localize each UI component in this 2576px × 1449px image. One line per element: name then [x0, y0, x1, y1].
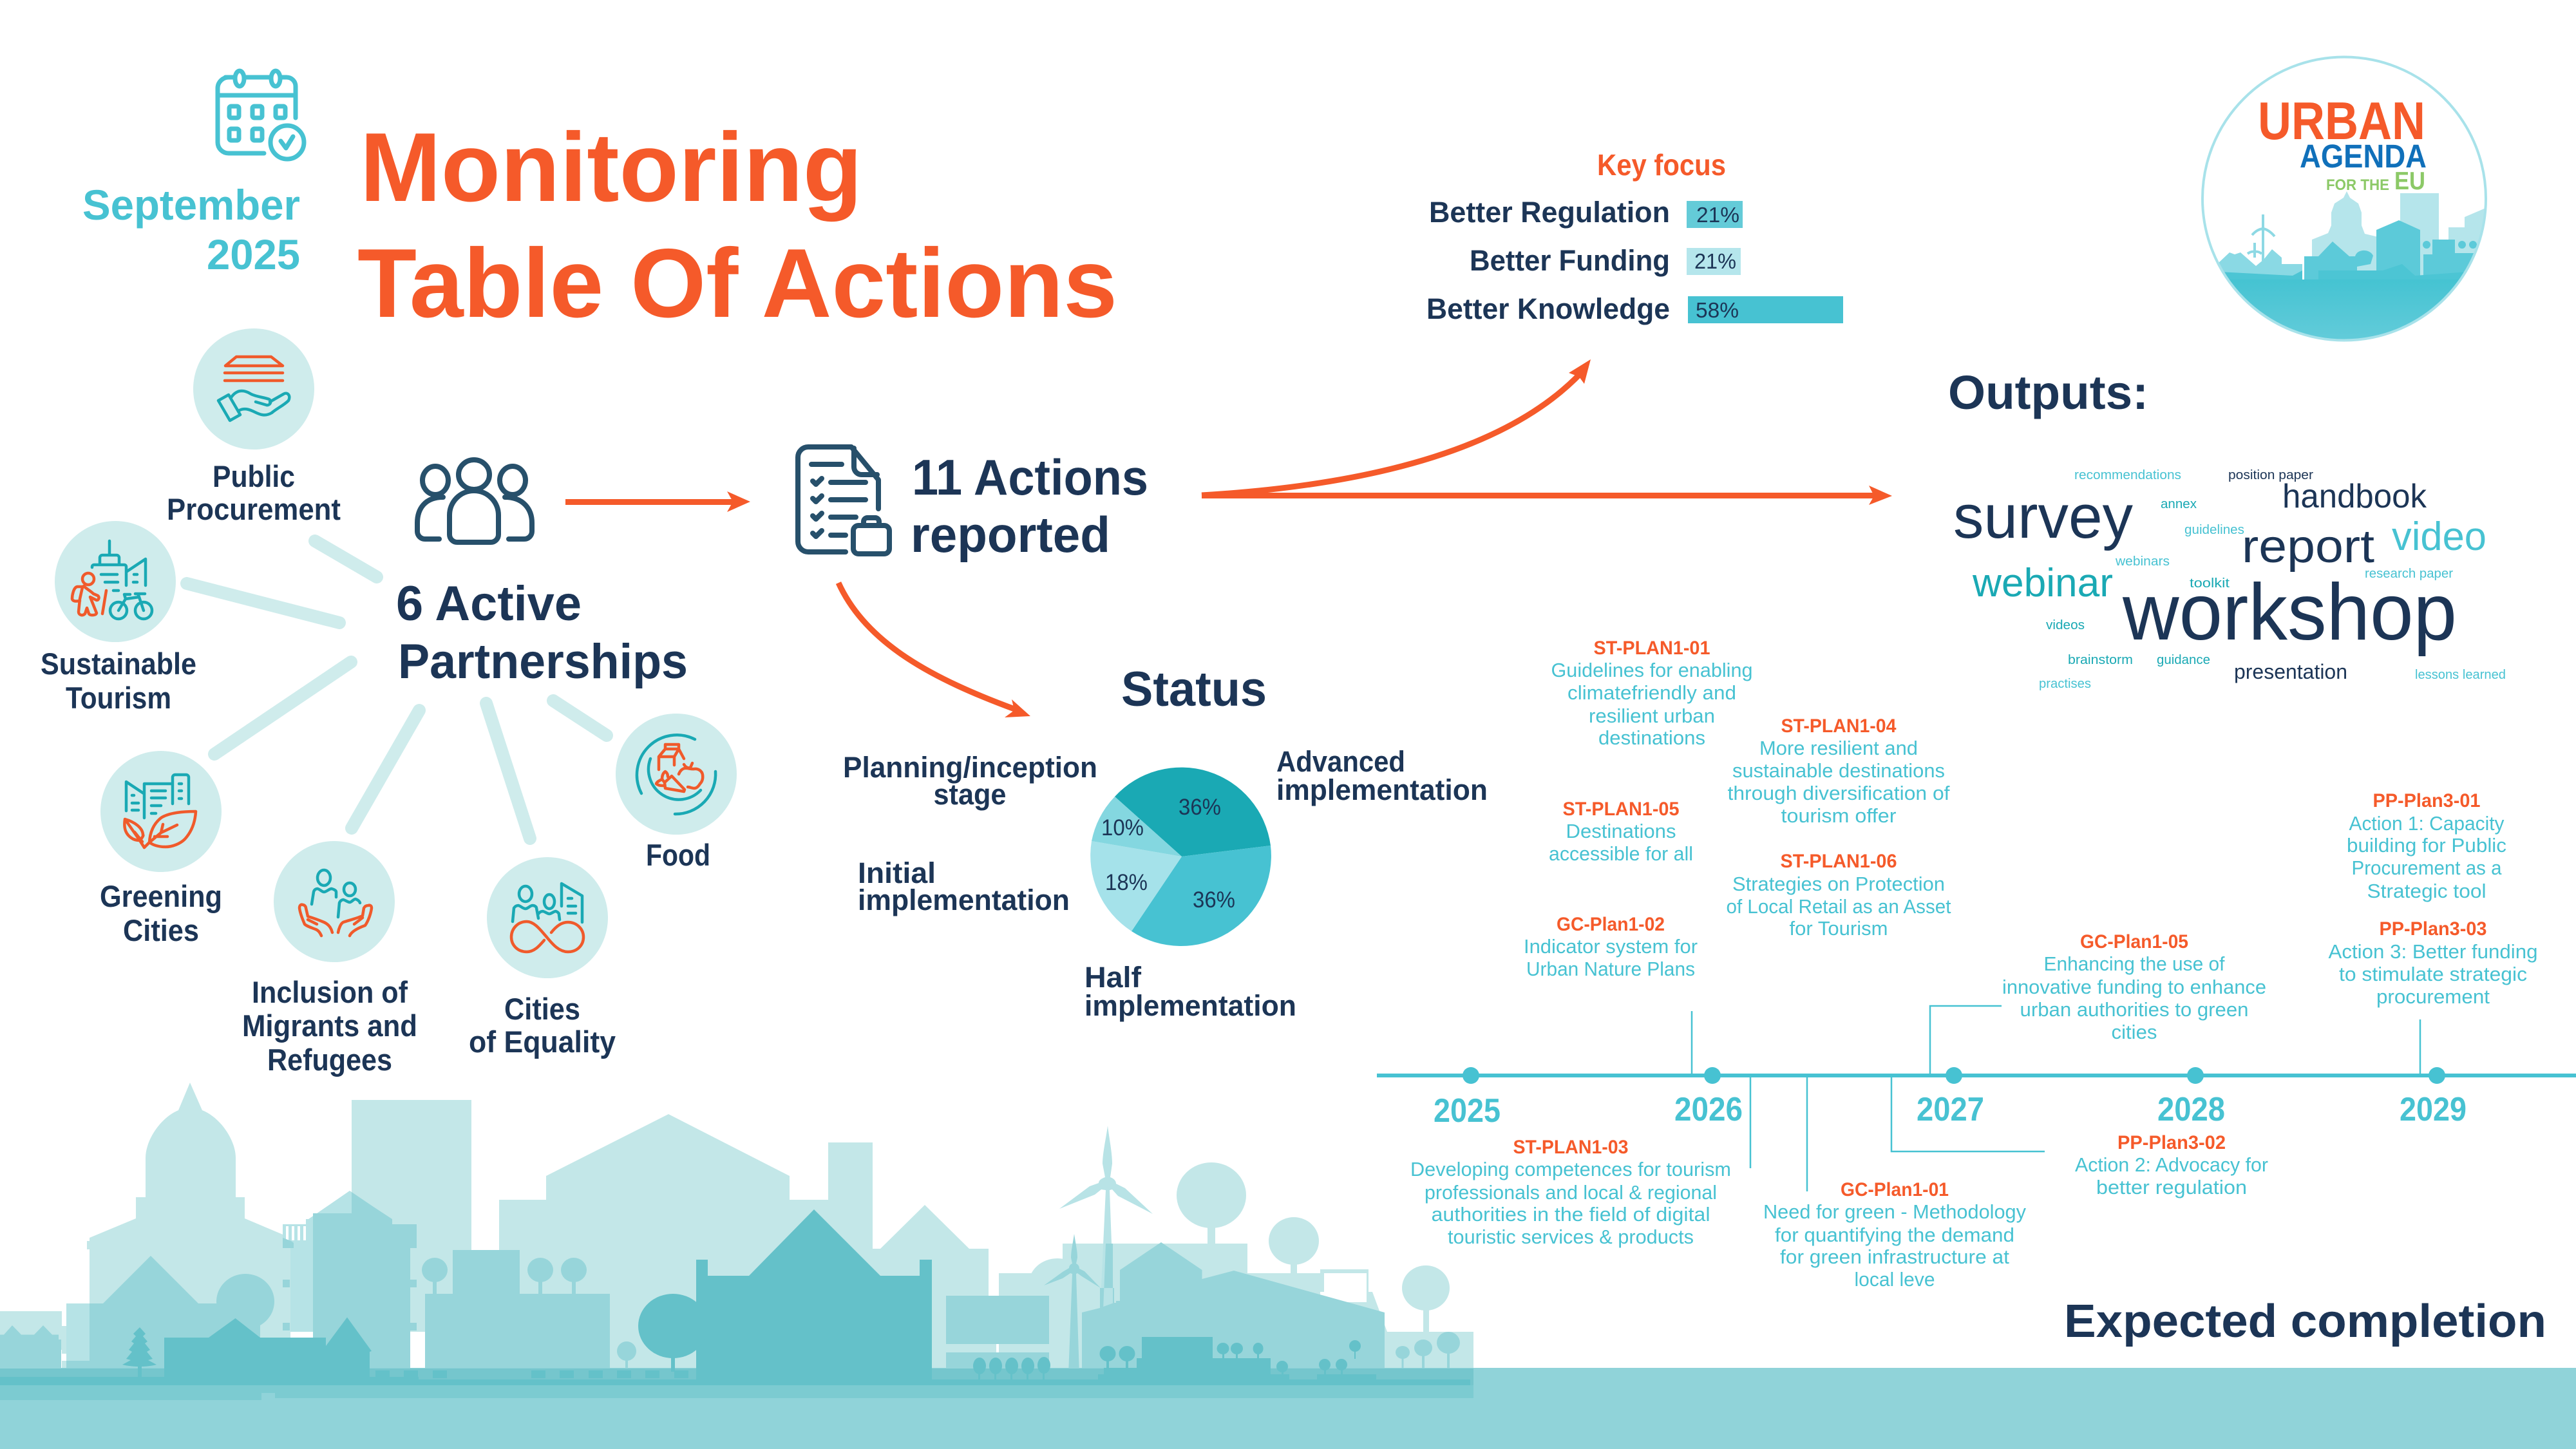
- action: ST-PLAN1-03: professionals and local & regional: [1425, 1181, 1717, 1204]
- action: GC-Plan1-01: Need for green - Methodology: [1763, 1200, 2026, 1223]
- action: GC-Plan1-01: [1763, 1179, 2026, 1291]
- illustration: city skyline: [0, 1083, 1473, 1400]
- word cloud: video: [2392, 515, 2486, 559]
- action: PP-Plan3-02: [2075, 1132, 2268, 1198]
- small wind turbine: [1044, 1234, 1101, 1375]
- icon: group of people: [417, 460, 532, 542]
- action: GC-Plan1-05: cities: [2111, 1021, 2157, 1043]
- timeline: [1377, 638, 2576, 1291]
- action: ST-PLAN1-03: [1410, 1137, 1731, 1248]
- word cloud: handbook: [2282, 478, 2427, 515]
- pie labels: Advanced: [1276, 745, 1405, 778]
- heading: 11 actions reported: [911, 449, 1148, 563]
- action: ST-PLAN1-01: Guidelines for enabling: [1551, 659, 1753, 681]
- pie chart: 10%: [1101, 815, 1144, 840]
- action: ST-PLAN1-01: destinations: [1598, 726, 1705, 749]
- timeline axis and year markers: [1377, 1067, 2576, 1130]
- date: September: [82, 181, 300, 229]
- pie labels: stage: [934, 778, 1006, 811]
- word cloud: webinar: [1972, 561, 2113, 605]
- bar chart: 58%: [1696, 298, 1739, 322]
- heading: 6 active partnerships: Partnerships: [398, 634, 688, 689]
- word cloud: practises: [2039, 677, 2091, 691]
- partnership: cities of equality: Cities: [504, 992, 580, 1026]
- action: PP-Plan3-01: Procurement as a: [2352, 857, 2502, 879]
- heading: expected completion: Expected completion: [2064, 1296, 2546, 1347]
- timeline connectors: [1692, 1006, 2420, 1191]
- action: ST-PLAN1-05: Destinations: [1566, 820, 1676, 842]
- action: ST-PLAN1-01: resilient urban: [1589, 705, 1715, 727]
- pie labels: Initial: [858, 857, 936, 889]
- action: PP-Plan3-03: PP-Plan3-03: [2379, 918, 2487, 940]
- action: PP-Plan3-01: Strategic tool: [2367, 880, 2486, 902]
- action: ST-PLAN1-04: through diversification of: [1727, 782, 1950, 804]
- action: GC-Plan1-01: local leve: [1855, 1268, 1935, 1291]
- heading: 11 actions reported: 11 Actions: [912, 449, 1148, 506]
- partnership: inclusion of migrants and refugees: [242, 841, 417, 1077]
- action: GC-Plan1-01: for quantifying the demand: [1775, 1224, 2014, 1246]
- action: GC-Plan1-05: GC-Plan1-05: [2080, 931, 2188, 952]
- action: ST-PLAN1-04: sustainable destinations: [1732, 759, 1945, 782]
- action: GC-Plan1-02: [1524, 914, 1698, 980]
- logo: urban agenda for the eu: URBAN: [2258, 91, 2425, 151]
- word cloud: toolkit: [2190, 576, 2230, 591]
- heading: key focus: Key focus: [1597, 148, 1726, 182]
- bar chart: 21%: [1696, 203, 1739, 227]
- partnership: public procurement: Public: [213, 459, 295, 493]
- partnership: public procurement: [167, 328, 341, 526]
- partnership: inclusion of migrants and refugees: Migrants and: [242, 1009, 417, 1043]
- arrow: actions to outputs: [1202, 486, 1892, 505]
- big wind turbine: [1059, 1126, 1153, 1314]
- action: ST-PLAN1-01: ST-PLAN1-01: [1593, 638, 1710, 659]
- word cloud: workshop: [2122, 568, 2457, 657]
- word cloud: webinars: [2115, 554, 2170, 569]
- panel: key focus: [1426, 148, 1843, 325]
- action: PP-Plan3-02: PP-Plan3-02: [2117, 1132, 2226, 1153]
- heading: 6 active partnerships: 6 Active: [396, 576, 582, 631]
- timeline axis and year markers: 2027: [1917, 1091, 1984, 1128]
- partnership: inclusion of migrants and refugees: Inclusion of: [252, 975, 408, 1009]
- action: PP-Plan3-01: [2347, 790, 2506, 902]
- partnership: inclusion of migrants and refugees: Refugees: [267, 1043, 392, 1077]
- word cloud: lessons learned: [2415, 668, 2506, 682]
- action: ST-PLAN1-01: climatefriendly and: [1567, 681, 1736, 704]
- action: PP-Plan3-01: Action 1: Capacity: [2349, 812, 2505, 835]
- word cloud: annex: [2161, 497, 2197, 511]
- pie labels: implementation: [1276, 773, 1488, 806]
- timeline axis and year markers: 2028: [2157, 1091, 2225, 1128]
- action: ST-PLAN1-06: [1726, 851, 1951, 940]
- action: GC-Plan1-02: Urban Nature Plans: [1526, 958, 1695, 980]
- arrow: actions to status: [838, 583, 1030, 717]
- partnership: cities of equality: of Equality: [469, 1025, 616, 1059]
- timeline axis and year markers: 2026: [1674, 1091, 1743, 1128]
- heading: 6 active partnerships: [396, 576, 688, 689]
- word cloud: guidelines: [2184, 523, 2244, 537]
- action: ST-PLAN1-05: [1549, 799, 1693, 865]
- action: ST-PLAN1-03: ST-PLAN1-03: [1513, 1137, 1628, 1158]
- ground band: [0, 1368, 2576, 1449]
- icon: checklist document: [798, 447, 889, 554]
- action: GC-Plan1-01: for green infrastructure at: [1780, 1245, 2009, 1268]
- action: GC-Plan1-02: GC-Plan1-02: [1557, 914, 1665, 935]
- arrow: partnerships to actions: [565, 491, 750, 512]
- word cloud: research paper: [2365, 567, 2453, 581]
- timeline axis and year markers: 2025: [1434, 1092, 1501, 1130]
- action: PP-Plan3-03: Action 3: Better funding: [2329, 940, 2537, 963]
- action: GC-Plan1-05: Enhancing the use of: [2044, 952, 2225, 975]
- action: ST-PLAN1-04: [1727, 715, 1950, 827]
- action: ST-PLAN1-03: touristic services & products: [1448, 1226, 1694, 1248]
- date: 2025: [207, 231, 300, 278]
- pie chart: 18%: [1105, 870, 1148, 895]
- partnership: food: [616, 714, 737, 872]
- partnership: sustainable tourism: [41, 521, 196, 715]
- action: PP-Plan3-03: [2329, 918, 2537, 1008]
- logo: urban agenda for the eu: [2190, 57, 2499, 344]
- word cloud: videos: [2046, 618, 2085, 632]
- heading: 11 actions reported: reported: [911, 506, 1110, 563]
- action: PP-Plan3-03: to stimulate strategic: [2339, 963, 2527, 985]
- pie labels: implementation: [858, 884, 1070, 916]
- logo: urban agenda for the eu: EU: [2394, 167, 2425, 195]
- partnership: food: Food: [646, 838, 710, 872]
- partnership: cities of equality: [469, 857, 616, 1059]
- action: PP-Plan3-03: procurement: [2376, 985, 2490, 1008]
- word cloud: brainstorm: [2068, 653, 2133, 667]
- action: GC-Plan1-05: innovative funding to enhance: [2002, 976, 2266, 998]
- word cloud: position paper: [2228, 468, 2313, 482]
- action: GC-Plan1-02: Indicator system for: [1524, 935, 1698, 958]
- heading: outputs: Outputs:: [1948, 366, 2148, 419]
- title: Monitoring: [360, 113, 862, 222]
- title: Table Of Actions: [357, 229, 1117, 338]
- pie chart: 36%: [1193, 887, 1235, 913]
- action: PP-Plan3-02: better regulation: [2096, 1176, 2247, 1198]
- action: GC-Plan1-01: GC-Plan1-01: [1841, 1179, 1949, 1200]
- pie labels: Half: [1084, 961, 1142, 994]
- bar chart: Better Knowledge: [1426, 292, 1670, 325]
- word cloud: presentation: [2234, 660, 2347, 683]
- action: ST-PLAN1-01: [1551, 638, 1753, 749]
- action: ST-PLAN1-06: ST-PLAN1-06: [1780, 851, 1897, 872]
- pie labels: [843, 745, 1488, 1022]
- action: PP-Plan3-01: building for Public: [2347, 834, 2506, 857]
- logo: urban agenda for the eu: FOR THE: [2326, 176, 2389, 194]
- partnership: sustainable tourism: Sustainable: [41, 647, 196, 681]
- timeline axis and year markers: 2029: [2400, 1091, 2467, 1128]
- pie chart: [1090, 768, 1271, 946]
- action: ST-PLAN1-04: More resilient and: [1759, 737, 1918, 759]
- action: ST-PLAN1-05: ST-PLAN1-05: [1562, 799, 1680, 820]
- date: [82, 181, 300, 278]
- action: ST-PLAN1-03: Developing competences for tourism: [1410, 1158, 1731, 1180]
- title: [357, 113, 1117, 338]
- word cloud: guidance: [2157, 653, 2210, 667]
- action: GC-Plan1-05: [2002, 931, 2266, 1043]
- bar chart: Better Regulation: [1429, 196, 1670, 229]
- action: ST-PLAN1-06: Strategies on Protection: [1732, 873, 1945, 895]
- action: ST-PLAN1-03: authorities in the field of digital: [1431, 1203, 1710, 1226]
- word cloud: survey: [1953, 482, 2133, 551]
- action: ST-PLAN1-04: ST-PLAN1-04: [1781, 715, 1897, 737]
- logo: urban agenda for the eu: AGENDA: [2300, 138, 2427, 175]
- partnership: greening cities: Cities: [123, 913, 199, 947]
- partnership: greening cities: Greening: [100, 879, 222, 913]
- word cloud: recommendations: [2074, 468, 2181, 482]
- pie labels: implementation: [1084, 989, 1296, 1022]
- arrow: actions to key focus: [1202, 359, 1591, 495]
- pie chart: 36%: [1179, 795, 1221, 820]
- action: ST-PLAN1-06: for Tourism: [1789, 917, 1888, 940]
- action: GC-Plan1-05: urban authorities to green: [2020, 998, 2249, 1021]
- heading: status: Status: [1121, 662, 1267, 717]
- action: ST-PLAN1-05: accessible for all: [1549, 842, 1693, 865]
- pie labels: Planning/inception: [843, 751, 1097, 784]
- bar chart: Better Funding: [1470, 244, 1670, 277]
- word cloud: [1953, 468, 2506, 691]
- partnership: public procurement: Procurement: [167, 492, 341, 526]
- word cloud: report: [2242, 521, 2374, 573]
- action: ST-PLAN1-04: tourism offer: [1781, 804, 1896, 827]
- panel: status: [843, 662, 1488, 1022]
- spokes connecting partnerships: [187, 541, 607, 838]
- action: PP-Plan3-01: PP-Plan3-01: [2372, 790, 2481, 811]
- icon: calendar: [218, 71, 304, 159]
- action: PP-Plan3-02: Action 2: Advocacy for: [2075, 1153, 2268, 1176]
- bar chart: 21%: [1694, 249, 1736, 273]
- partnership: sustainable tourism: Tourism: [66, 681, 171, 715]
- partnership: greening cities: [100, 751, 222, 947]
- bar chart: [1426, 196, 1843, 325]
- action: ST-PLAN1-06: of Local Retail as an Asset: [1726, 895, 1951, 918]
